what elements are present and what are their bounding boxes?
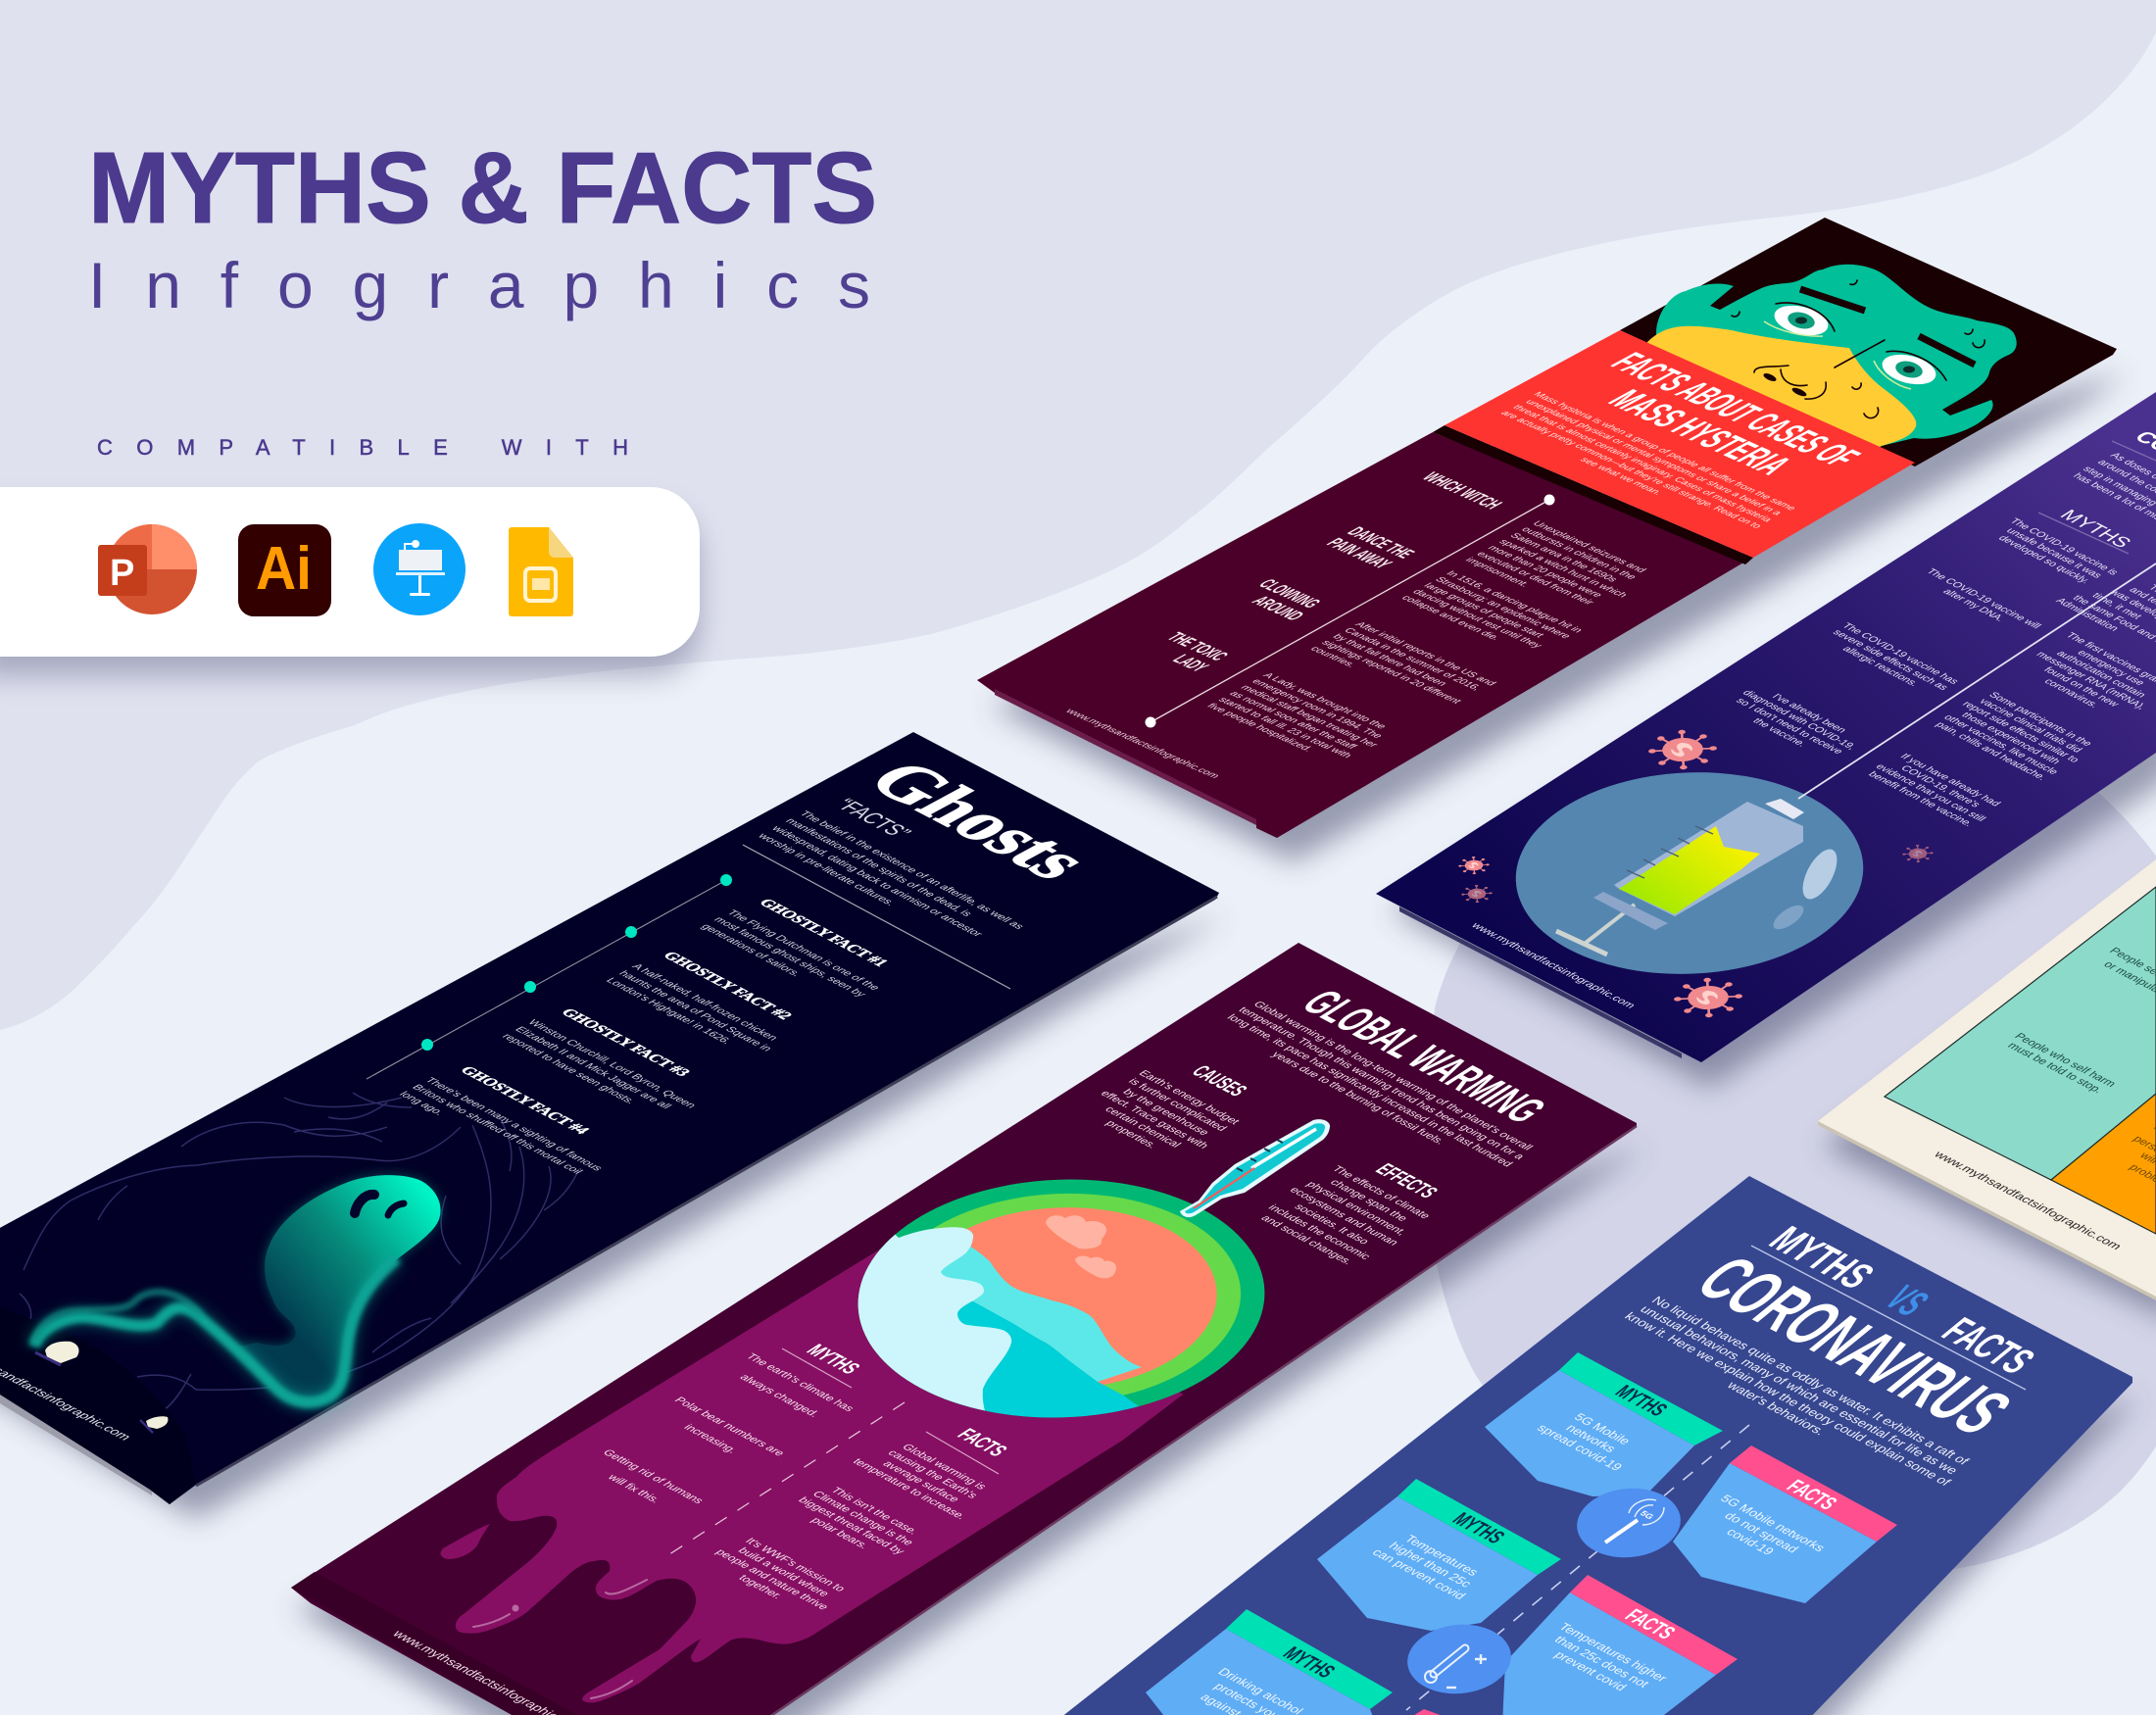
text: covid facts: report side effects similar to — [1959, 700, 2082, 764]
section: effects: change span the — [1327, 1178, 1410, 1223]
title: myths and facts: MYTHS & FACTS — [88, 131, 877, 244]
panel: global warming — [291, 943, 1637, 1715]
text: coronavirus intro: No liquid behaves quite as oddly as water. It exhibits a raft of — [1648, 1294, 1973, 1467]
heading: facts about cases of mass hysteria: FACTS ABOUT CASES OF — [1600, 347, 1870, 472]
illustration: earth globe — [858, 1180, 1264, 1417]
text: case descriptions — [1204, 519, 1664, 767]
labels: hysteria case names: THE TOXIC — [1162, 630, 1233, 663]
text: case descriptions: Strasbourg; an epidemic where — [1432, 575, 1574, 640]
panel: ghosts: haunts the area of Pond Square in — [616, 969, 774, 1053]
text: case descriptions: collapse and even die. — [1398, 594, 1503, 642]
text: covid facts: other vaccines, like muscle — [1940, 713, 2061, 776]
heading: ghosts: Ghosts — [850, 751, 1111, 889]
panel: ghosts: Elizabeth II and Mick Jagger are all — [513, 1025, 673, 1110]
section: effects: includes the economic — [1265, 1203, 1373, 1261]
panel: ghosts: The Flying Dutchman is one of the — [724, 908, 882, 992]
card: fact 5g: covid-19 — [1724, 1526, 1778, 1557]
globe: ice sheet — [858, 1227, 1011, 1411]
section: myths: Polar bear numbers are — [671, 1396, 787, 1458]
section: facts: biggest threat faced by — [796, 1495, 906, 1556]
icon: google slides — [509, 527, 573, 616]
timeline — [367, 874, 732, 1079]
text: covid myths — [1720, 516, 2121, 764]
icon: keynote — [373, 523, 466, 615]
icon: slime drop — [441, 1524, 490, 1559]
panel: ghosts: There's been many a sighting of famous — [422, 1076, 606, 1173]
text: covid myths: I've already been — [1769, 692, 1849, 735]
section: facts: temperature to increase. — [850, 1457, 968, 1521]
card: fact temperature: FACTS — [1620, 1605, 1681, 1642]
red header band — [1445, 330, 1915, 558]
card: myth 5g: 5G Mobile — [1571, 1411, 1634, 1447]
text: covid facts: vaccine clinical trials did — [1977, 697, 2084, 755]
text: covid myths: the vaccine. — [1750, 716, 1809, 749]
background: upper wave shape — [0, 0, 2156, 1030]
section: facts: polar bears. — [808, 1516, 871, 1550]
card: next fact header — [1411, 1709, 1446, 1715]
text: case descriptions: as normal soon after the staff — [1226, 690, 1359, 751]
card: myth 5g: spread covid-19 — [1534, 1422, 1626, 1473]
text: covid myths: The COVID-19 vaccine has — [1839, 621, 1961, 686]
dark ground hill — [0, 1306, 196, 1504]
section: myths: always changed. — [737, 1373, 821, 1419]
labels: hysteria case names: DANCE THE — [1342, 524, 1419, 562]
icon: gravestones — [35, 1342, 168, 1433]
text: case descriptions: medical staff began treating her — [1238, 684, 1381, 749]
section: causes: effect. Trace gases with — [1098, 1089, 1210, 1151]
text: case descriptions: large groups of people start — [1421, 582, 1546, 639]
section: effects: The effects of climate — [1329, 1164, 1433, 1221]
panel: ghosts: most famous ghost ships, seen by — [711, 915, 868, 999]
text: covid facts: If you have already had — [1897, 752, 2003, 808]
globe: deep cyan sea — [944, 1301, 1139, 1417]
text: coronavirus intro: unusual behaviors, many of which are essential for life as we — [1637, 1303, 1961, 1477]
section: causes: properties. — [1102, 1119, 1159, 1151]
text: warming intro: long time, its pace has significantly increased in the last hundred — [1224, 1013, 1515, 1168]
labels: hysteria case names: WHICH WITCH — [1417, 469, 1506, 512]
heading: myths vs facts: FACTS — [1932, 1309, 2046, 1381]
text: case descriptions: imprisonment. — [1462, 556, 1532, 589]
card: fact 5g — [1673, 1446, 1897, 1603]
section: facts: It's WWF's mission to — [742, 1537, 848, 1593]
section: myths: will fix this. — [604, 1473, 662, 1505]
section: facts: FACTS — [952, 1425, 1013, 1459]
card: myth 5g — [1485, 1352, 1723, 1496]
heading: global warming: GLOBAL WARMING — [1291, 983, 1558, 1130]
text: case descriptions: Salem area in the 1690s — [1507, 532, 1620, 583]
card: myth 5g: MYTHS — [1610, 1381, 1673, 1420]
section: effects — [1250, 1160, 1444, 1271]
section: facts: Climate change is the — [809, 1490, 915, 1547]
text: ghosts intro: worship in pre-literate cultures. — [755, 832, 898, 907]
card: myth temperature: Temperatures — [1401, 1533, 1483, 1578]
title block — [88, 131, 877, 321]
text: beige website: www.mythsandfactsinfographic.com — [1931, 1149, 2125, 1251]
text: ghostly facts: GHOSTLY FACT #2 — [659, 950, 795, 1022]
text: ghostly facts — [456, 897, 891, 1137]
panel: coronavirus myths vs facts — [1052, 1176, 2132, 1715]
panel: ghosts — [0, 732, 1219, 1504]
section: facts: people and nature thrive — [712, 1548, 831, 1612]
section: effects: and social changes. — [1258, 1214, 1355, 1266]
text: case descriptions: sparked a witch hunt in which — [1495, 538, 1630, 599]
heading: myths vs facts: VS — [1875, 1278, 1939, 1323]
section: facts: build a world where — [735, 1546, 831, 1598]
text: warming intro: years due to the burning of fossil fuels. — [1269, 1051, 1447, 1147]
section: causes — [1074, 1061, 1253, 1165]
labels: hysteria case names: PAIN AWAY — [1321, 536, 1396, 571]
section: effects: societies. It also — [1292, 1202, 1371, 1247]
maroon lower section — [977, 432, 1745, 838]
text: case descriptions: outbursts in children in the — [1518, 525, 1640, 581]
card: myth temperature — [1317, 1479, 1561, 1631]
text: case descriptions: countries. — [1307, 645, 1359, 669]
section: causes: certain chemical — [1102, 1105, 1183, 1150]
card: fact temperature: than 25c does not — [1551, 1634, 1653, 1690]
section: myths — [581, 1341, 866, 1518]
timeline — [1798, 564, 2156, 799]
panel: compatible apps card — [0, 487, 700, 657]
teal column — [1885, 887, 2156, 1180]
section: causes: CAUSES — [1187, 1061, 1253, 1100]
text: covid facts — [1863, 563, 2156, 830]
text: self harm myths — [2002, 947, 2156, 1097]
road: dashed centre line — [1406, 1425, 1749, 1710]
text: hysteria intro: Mass hysteria is when a group of people all suffer from the same — [1531, 391, 1798, 513]
text: covid myths: diagnosed with COVID-19, — [1740, 688, 1859, 752]
text: case descriptions: by that fall there had been — [1330, 633, 1449, 688]
panel: self harm myths (beige) — [1818, 859, 2156, 1300]
heading: facts about cases of mass hysteria — [1597, 347, 1870, 480]
text: hysteria intro: unexplained physical or mental symptoms or share a belief in a — [1523, 399, 1784, 516]
icon: powerpoint: P — [110, 553, 134, 594]
text: warming intro: temperature. Though this warming trend has been going on for a — [1236, 1005, 1527, 1161]
white card shadow — [0, 507, 700, 676]
section: facts: Global warming is — [899, 1443, 989, 1492]
text: covid facts: found on the new — [2041, 665, 2122, 709]
card: myth alcohol — [1146, 1609, 1393, 1715]
icon: illustrator — [238, 524, 331, 616]
section: causes: is further complicated — [1125, 1077, 1229, 1133]
text: covid facts: benefit from the vaccine. — [1866, 770, 1976, 828]
text: covid facts: time, it met — [2089, 591, 2144, 621]
purple slime backdrop — [456, 1238, 1183, 1703]
section: facts — [701, 1425, 1013, 1619]
globe: light cyan sea — [941, 1247, 1142, 1382]
text: self harm myths: must be told to stop. — [2005, 1041, 2105, 1096]
text: case descriptions: more than 20 people were — [1485, 544, 1605, 599]
text: covid myths: The COVID-19 vaccine will — [1924, 567, 2043, 630]
text: hysteria intro: threat that is almost certainly imaginary. Cases of mass hysteria — [1510, 404, 1774, 523]
orange column — [2051, 1094, 2156, 1234]
panel: ghosts: A half-naked, half-frozen chicken — [629, 962, 780, 1042]
text: case descriptions: Unexplained seizures and — [1530, 519, 1649, 574]
text: hysteria website: www.mythsandfactsinfographic.com — [1061, 707, 1222, 780]
panel: mass hysteria — [977, 218, 2117, 838]
text: warming intro: Global warming is the long-term warming of the planet's overall — [1250, 1000, 1535, 1152]
label: compatible with: COMPATIBLE WITH — [97, 435, 628, 460]
text: covid facts: Some participants in the — [1986, 691, 2095, 748]
text: covid facts: COVID-19, there's — [1898, 763, 1983, 809]
panel: ghosts: generations of sailors. — [698, 922, 804, 978]
section: myths: Getting rid of humans — [600, 1448, 706, 1505]
background: lavender blob — [1428, 706, 2156, 1577]
text: covid myths: alter my DNA. — [1940, 587, 2007, 623]
text: ghosts intro: The belief in the existence of an afterlife, as well as — [797, 809, 1027, 931]
highlights on slime — [448, 1549, 647, 1698]
heading: facts about cases of mass hysteria: MASS HYSTERIA — [1597, 384, 1802, 480]
panel shadows — [0, 372, 2156, 1715]
text: covid facts: emergency use — [2075, 649, 2147, 687]
section: myths: The earth's climate has — [743, 1352, 857, 1413]
divider: dashed — [663, 1402, 905, 1558]
panel: covid vaccine — [1376, 392, 2156, 1062]
text: covid myths: severe side effects such as — [1830, 628, 1951, 692]
globe: clouds — [1046, 1215, 1116, 1278]
text: hysteria intro: are actually pretty common—but they're still strange. Read on to — [1497, 410, 1764, 530]
card: fact 5g: 5G Mobile networks — [1717, 1493, 1829, 1554]
text: covid website: www.mythsandfactsinfographic.com — [1468, 921, 1638, 1010]
icon: slime highlight dot — [512, 1605, 519, 1611]
text: orange column — [2127, 1122, 2156, 1189]
icon: powerpoint — [98, 524, 197, 614]
text: ghosts intro: widespread, dating back to animism or ancestor — [768, 824, 985, 939]
text: covid myths: developed so quickly. — [1995, 534, 2092, 585]
card: fact temperature: Temperatures higher — [1556, 1621, 1671, 1685]
text: covid facts: Administration — [2053, 597, 2122, 633]
section: facts: average surface — [880, 1459, 961, 1504]
labels: hysteria case names: LADY — [1167, 652, 1213, 674]
card: myth 5g: networks — [1563, 1422, 1620, 1455]
icon: thermometer badge — [1386, 1611, 1533, 1707]
black top section — [1620, 218, 2117, 466]
text: covid myths: allergic reactions. — [1839, 645, 1921, 688]
text: case descriptions: In 1516, a dancing plague hit in — [1444, 569, 1586, 634]
text: covid myths: unsafe because it was — [2003, 526, 2104, 580]
panel: ghosts: Winston Churchill, Lord Byron, Queen — [525, 1018, 699, 1109]
text: ghostly facts: GHOSTLY FACT #1 — [755, 897, 891, 969]
panel: ghosts: long ago. — [396, 1090, 447, 1117]
text: case descriptions: After initial reports in the US and — [1352, 620, 1498, 687]
text: coronavirus intro: know it. Here we explain how the theory could explain some of — [1622, 1310, 1954, 1488]
panel: ghosts: London's Highgate! in 1626. — [603, 976, 734, 1046]
card: myth temperature: can prevent covid — [1369, 1546, 1469, 1601]
card: fact temperature — [1502, 1575, 1738, 1715]
section: effects: ecosystems and human — [1287, 1186, 1400, 1248]
timeline — [1145, 494, 1554, 727]
text: case descriptions: dancing without rest until they — [1409, 588, 1545, 650]
card: myth alcohol: MYTHS — [1278, 1642, 1341, 1682]
text: case descriptions: executed or died from their — [1474, 550, 1597, 607]
section: causes: Earth's energy budget — [1136, 1069, 1243, 1127]
illustration: worried green face — [1617, 265, 2017, 461]
text: covid myths: so I don't need to receive — [1733, 697, 1845, 756]
icon: 5g antenna: 5G — [1638, 1509, 1656, 1521]
section: facts: causing the Earth's — [885, 1448, 980, 1500]
section: facts: together. — [736, 1574, 785, 1600]
text: case descriptions: started to fall ill. 23 in total with — [1215, 696, 1354, 760]
text: covid facts: pain, chills and headache. — [1933, 720, 2049, 782]
text: case descriptions: A Lady, was brought into the — [1260, 671, 1390, 730]
labels: hysteria case names: AROUND — [1247, 594, 1308, 623]
text: ghostly facts: GHOSTLY FACT #3 — [557, 1006, 693, 1079]
section: causes: by the greenhouse — [1120, 1088, 1211, 1137]
text: covid facts: evidence that you can still — [1873, 762, 1988, 823]
heading: myths: MYTHS — [2055, 507, 2135, 551]
card: fact temperature: prevent covid — [1551, 1648, 1630, 1693]
black band under red — [1433, 425, 1753, 564]
section: myths: increasing. — [681, 1423, 739, 1455]
icon: 5g antenna — [1555, 1475, 1702, 1571]
heading: myths vs facts — [1751, 1218, 2046, 1390]
text: ghostly facts: GHOSTLY FACT #4 — [456, 1064, 592, 1137]
text: case descriptions: Canada in the summer of 2016, — [1341, 626, 1484, 692]
section: effects: EFFECTS — [1370, 1160, 1444, 1201]
icon: illustrator: Ai — [256, 535, 312, 603]
text: case descriptions: emergency room in 1994. The — [1249, 677, 1386, 740]
text: coronavirus intro: water's behaviors. — [1723, 1379, 1829, 1438]
text: case descriptions: five people hospitalized. — [1204, 702, 1315, 753]
illustration: faint tree lines — [20, 1093, 578, 1411]
text: self harm myths: People who self harm — [2012, 1032, 2118, 1089]
illustration: thermometer — [1180, 1119, 1330, 1217]
text: covid myths: The COVID-19 vaccine is — [2007, 516, 2121, 577]
card: myth temperature: higher than 25c — [1386, 1540, 1476, 1590]
text: covid facts: coronavirus. — [2041, 677, 2101, 710]
card: fact 5g: FACTS — [1782, 1476, 1842, 1513]
illustration: syringe in bubble — [1444, 731, 1936, 1015]
icons: virus particles — [1453, 723, 1938, 1024]
heading: myths vs facts: MYTHS — [1759, 1218, 1886, 1297]
labels: hysteria case names — [1162, 469, 1506, 674]
subheading: facts: “FACTS” — [829, 796, 916, 842]
panel: ghosts: reported to have seen ghosts. — [499, 1032, 638, 1105]
panel: ghosts: Britons who shuffled off this mortal coil — [410, 1083, 585, 1176]
section: effects: physical environment, — [1303, 1180, 1408, 1237]
section: facts: This isn't the case. — [828, 1486, 920, 1537]
text: ghosts intro: manifestations of the spirits of the dead, is — [783, 817, 975, 918]
illustration: glowing ghost — [34, 1175, 441, 1403]
labels: hysteria case names: CLOWNING — [1253, 576, 1325, 611]
text: covid facts: authorization contain — [2053, 649, 2148, 700]
section: myths: MYTHS — [802, 1341, 866, 1377]
card: fact 5g: do not spread — [1722, 1509, 1802, 1555]
card: myth temperature: MYTHS — [1447, 1508, 1510, 1547]
subtitle: infographics: Infographics — [88, 249, 870, 321]
text: covid facts: those experienced with — [1959, 710, 2063, 766]
text: hysteria intro: see what we mean. — [1577, 457, 1664, 497]
text: covid facts: messenger RNA (mRNA), — [2034, 650, 2149, 711]
text: case descriptions: sightings reported in 20 different — [1318, 639, 1464, 706]
